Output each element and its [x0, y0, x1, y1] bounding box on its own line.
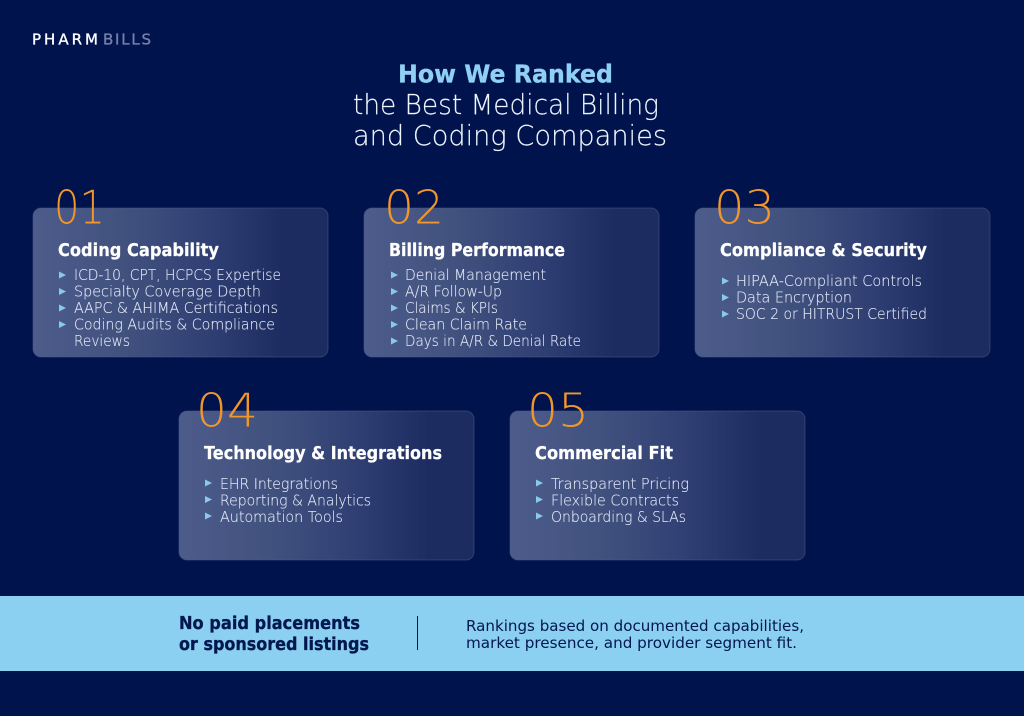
title: and Coding Companies — [353, 119, 667, 152]
list: SOC 2 or HITRUST Certified — [736, 305, 927, 323]
text: ranking basis: Rankings based on documented capabilities, — [466, 617, 804, 635]
text: ranking basis: market presence, and provider segment fit. — [466, 634, 797, 652]
callout: no paid placements — [179, 613, 369, 655]
number 03: 03 — [714, 180, 775, 234]
list — [59, 266, 281, 350]
panel: coding capability — [33, 180, 328, 357]
callout: no paid placements: or sponsored listings — [179, 634, 369, 655]
list — [536, 475, 689, 526]
number 04: 04 — [196, 384, 258, 438]
list: Automation Tools — [220, 508, 343, 526]
title: How We Ranked — [398, 60, 613, 88]
panel: technology and integrations — [179, 384, 474, 560]
title — [353, 60, 667, 152]
number 05: 05 — [527, 384, 589, 438]
list: ICD-10, CPT, HCPCS Expertise — [74, 266, 281, 284]
heading: Technology & Integrations — [204, 443, 442, 464]
list — [391, 266, 581, 350]
list — [205, 475, 371, 526]
list: Claims & KPIs — [405, 299, 498, 317]
number 01: 01 — [54, 180, 105, 234]
panel: compliance and security — [695, 180, 990, 357]
panel: billing performance — [364, 180, 659, 357]
list: Coding Audits & Compliance — [74, 316, 275, 334]
list: Specialty Coverage Depth — [74, 282, 261, 300]
heading: Commercial Fit — [535, 443, 673, 464]
title: the Best Medical Billing — [353, 88, 659, 121]
logo: BILLS — [103, 30, 151, 48]
logo: PHARM — [32, 30, 98, 48]
heading: Billing Performance — [389, 240, 565, 261]
list: AAPC & AHIMA Certifications — [74, 299, 278, 317]
list: A/R Follow-Up — [405, 282, 502, 300]
list: Reporting & Analytics — [220, 492, 371, 510]
list: EHR Integrations — [220, 475, 338, 493]
list — [722, 272, 927, 323]
list: Transparent Pricing — [551, 475, 689, 493]
list: Flexible Contracts — [551, 492, 679, 510]
list: Data Encryption — [736, 288, 852, 306]
list: Days in A/R & Denial Rate — [405, 332, 581, 350]
number 02: 02 — [384, 180, 444, 234]
logo — [32, 30, 151, 48]
footer band — [0, 596, 1024, 671]
list: Onboarding & SLAs — [551, 508, 686, 526]
list: Clean Claim Rate — [405, 316, 527, 334]
list: Reviews — [74, 332, 130, 350]
heading: Compliance & Security — [720, 240, 927, 261]
text: ranking basis — [466, 617, 804, 652]
callout: no paid placements: No paid placements — [179, 613, 360, 634]
heading: Coding Capability — [58, 240, 219, 261]
list: Denial Management — [405, 266, 546, 284]
list: HIPAA-Compliant Controls — [736, 272, 922, 290]
panel: commercial fit — [510, 384, 805, 560]
